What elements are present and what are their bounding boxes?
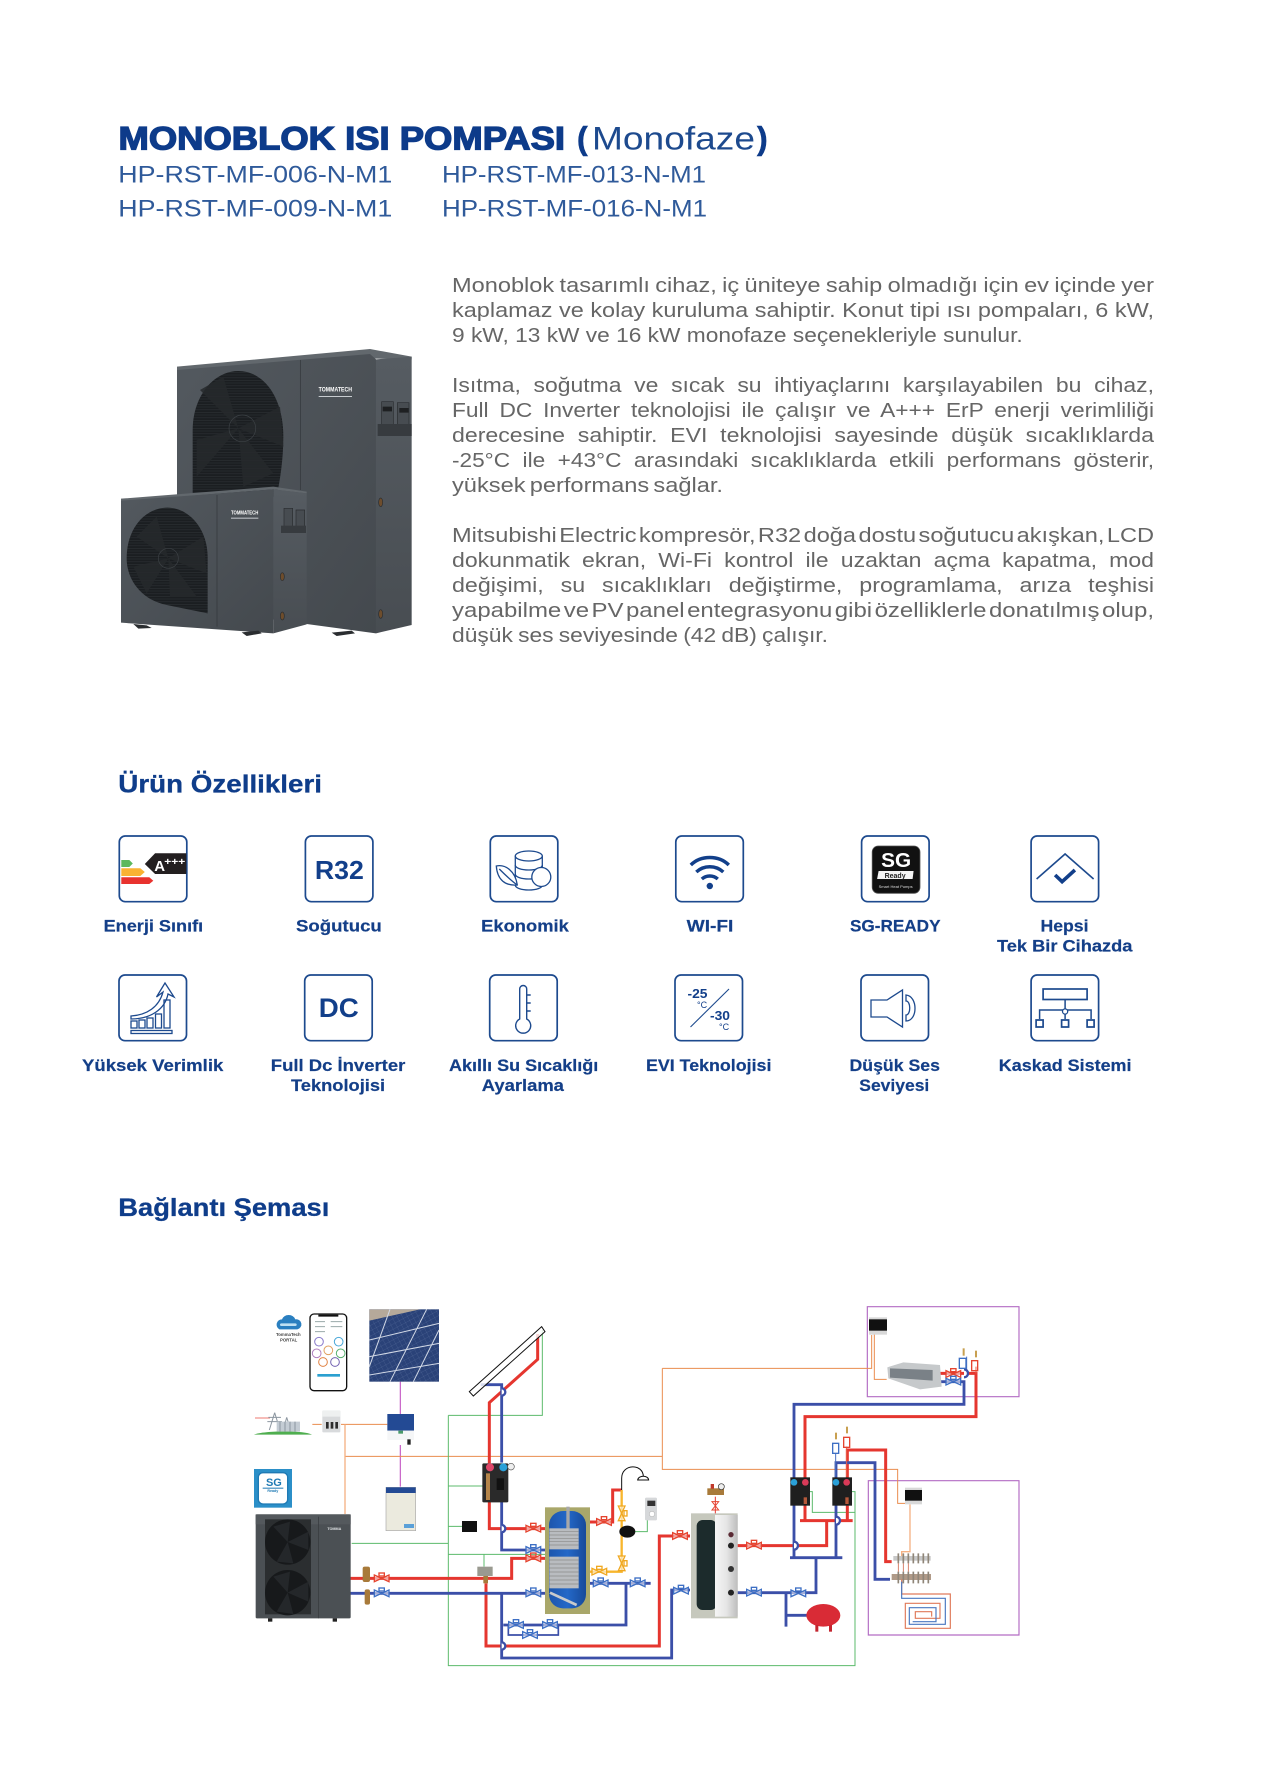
icon: SG ready badge: SG (881, 850, 911, 872)
circulation pump (619, 1526, 635, 1538)
title: ( (577, 120, 588, 156)
SG ready logo: Ready (267, 1489, 279, 1493)
icon: thermometer (490, 975, 557, 1041)
air vents on fan coil pipes (833, 1348, 978, 1453)
feature: EVI technology (646, 975, 771, 1075)
label: Soğutucu (296, 918, 382, 936)
label: Düşük Ses (850, 1057, 940, 1075)
heat pump unit (256, 1514, 351, 1622)
domestic hot water tank (545, 1507, 590, 1614)
icon: SG ready badge: Ready (885, 871, 906, 880)
title: Monofaze (592, 120, 755, 156)
product description text: Mitsubishi Electric kompresör, R32 doğa dostu soğutucu akışkan, LCD (452, 525, 1154, 547)
icon: coins and leaf (490, 836, 558, 902)
icon: energy label: +++ (164, 857, 185, 868)
mixing valve (477, 1567, 493, 1583)
product description text: Isıtma, soğutma ve sıcak su ihtiyaçlarını karşılayabilen bu cihaz, (452, 375, 1154, 397)
feature: economic (481, 836, 570, 936)
battery (386, 1487, 416, 1531)
zone thermostat bottom (905, 1488, 922, 1504)
icon: EVI temperature: -25 (688, 987, 708, 1001)
feature: cascade (999, 975, 1132, 1075)
solar pump station (482, 1463, 514, 1502)
product photo: two heat pump units (121, 349, 412, 636)
product description text: düşük ses seviyesinde (42 dB) çalışır. (452, 625, 828, 647)
control and power wiring (255, 1307, 1019, 1666)
safety valve group on buffer tank (707, 1484, 724, 1510)
icon: SG ready badge (862, 836, 929, 902)
SG ready logo (254, 1469, 292, 1508)
title: MONOBLOK ISI POMPASI (118, 120, 565, 156)
label: Yüksek Verimlik (82, 1057, 224, 1075)
feature: all in one: Tek Bir Cihazda (997, 938, 1133, 956)
feature: energy class (104, 836, 203, 936)
underfloor manifold (892, 1553, 931, 1583)
icon: EVI temperature: °C (697, 1000, 708, 1010)
icon: SG ready badge: Smart Heat Pumps (879, 884, 913, 889)
icon: energy label (119, 836, 187, 902)
icon: wifi (676, 836, 743, 902)
feature: low noise: Seviyesi (859, 1077, 929, 1095)
icon: EVI temperature: °C (719, 1022, 730, 1032)
label: Akıllı Su Sıcaklığı (449, 1057, 598, 1075)
valves on pipes (374, 1369, 961, 1638)
phone app and cloud portal: TommaTech (276, 1332, 301, 1337)
fan coil unit (887, 1362, 942, 1389)
heating water pipes (348, 1334, 976, 1658)
title (118, 120, 768, 156)
model codes (118, 162, 707, 223)
label: WI-FI (687, 918, 733, 936)
phone app and cloud portal: PORTAL (280, 1337, 298, 1342)
zone pump station 2 (832, 1477, 852, 1506)
energy meter (645, 1498, 657, 1520)
product photo: two heat pump units: TOMMATECH (231, 510, 258, 516)
icon: roof with check (1031, 836, 1099, 902)
product description text (452, 275, 1155, 647)
phone app and cloud portal (276, 1314, 347, 1391)
icon: EVI temperature (675, 975, 742, 1041)
power grid illustration (254, 1413, 312, 1435)
icon: energy label: A (154, 858, 165, 875)
shower head (622, 1467, 649, 1490)
zone thermostat top (869, 1317, 887, 1335)
product description text: 9 kW, 13 kW ve 16 kW monofaze seçenekleriyle sunulur. (452, 325, 1023, 347)
label: Kaskad Sistemi (999, 1057, 1132, 1075)
model codes: HP-RST-MF-006-N-M1 (118, 162, 392, 189)
connection diagram (254, 1307, 1019, 1666)
product description text: yüksek performans sağlar. (452, 475, 723, 497)
icon: speaker (861, 975, 928, 1041)
icon: growth chart (119, 975, 186, 1041)
brass fittings (363, 1567, 370, 1605)
product description text: değişimi, su sıcaklıkları değiştirme, programlama, arıza teşhisi (452, 575, 1154, 597)
heat pump unit: TOMMA (327, 1527, 342, 1531)
solar inverter (387, 1414, 414, 1445)
solar photovoltaic panel photo (369, 1309, 439, 1382)
icon: R32: R32 (315, 855, 364, 885)
label: Full Dc İnverter (271, 1057, 406, 1075)
buffer tank (691, 1513, 738, 1618)
feature: all in one (997, 836, 1133, 956)
feature: high efficiency (82, 975, 224, 1075)
heading: product features: Ürün Özellikleri (118, 769, 322, 798)
label: Ekonomik (481, 918, 570, 936)
model codes: HP-RST-MF-013-N-M1 (442, 162, 706, 189)
label: Enerji Sınıfı (104, 918, 203, 936)
title: ) (757, 120, 768, 156)
underfloor heating coil (902, 1579, 950, 1628)
heading: connection diagram: Bağlantı Şeması (118, 1194, 329, 1222)
zone pump station 1 (790, 1477, 810, 1506)
features grid (82, 836, 1133, 1095)
feature: low noise (850, 975, 940, 1095)
circuit breaker (322, 1411, 340, 1432)
solar thermal collector (469, 1327, 545, 1396)
model codes: HP-RST-MF-009-N-M1 (118, 196, 392, 223)
SG ready logo: SG (266, 1477, 282, 1489)
product description text: yapabilme ve PV panel entegrasyonu gibi özelliklerle donatılmış olup, (452, 600, 1154, 622)
feature: refrigerant (296, 836, 382, 936)
label: EVI Teknolojisi (646, 1057, 771, 1075)
label: SG-READY (850, 918, 941, 936)
expansion vessel (806, 1604, 840, 1632)
label: Hepsi (1040, 918, 1088, 936)
product description text: derecesine sahiptir. EVI teknolojisi sayesinde düşük sıcaklıklarda (452, 425, 1155, 447)
model codes: HP-RST-MF-016-N-M1 (442, 196, 707, 223)
wall thermostat (462, 1521, 477, 1532)
product photo: two heat pump units: TOMMATECH (319, 387, 352, 394)
feature: smart water temperature (449, 975, 598, 1095)
icon: EVI temperature: -30 (710, 1009, 730, 1023)
feature: SG ready (850, 836, 941, 936)
feature: smart water temperature: Ayarlama (482, 1077, 565, 1095)
icon: DC: DC (319, 993, 359, 1023)
product description text: kaplamaz ve kolay kuruluma sahiptir. Konut tipi ısı pompaları, 6 kW, (452, 300, 1154, 322)
product description text: dokunmatik ekran, Wi-Fi kontrol ile uzaktan açma kapatma, mod (452, 550, 1154, 572)
feature: full DC inverter (271, 975, 406, 1095)
feature: full DC inverter: Teknolojisi (291, 1077, 385, 1095)
product description text: Full DC Inverter teknolojisi ile çalışır ve A+++ ErP enerji verimliliği (452, 400, 1154, 422)
product description text: -25°C ile +43°C arasındaki sıcaklıklarda etkili performans gösterir, (452, 450, 1154, 472)
product description text: Monoblok tasarımlı cihaz, iç üniteye sahip olmadığı için ev içinde yer (452, 275, 1154, 297)
feature: Wi-Fi (676, 836, 743, 936)
icon: cascade hierarchy (1031, 975, 1099, 1041)
